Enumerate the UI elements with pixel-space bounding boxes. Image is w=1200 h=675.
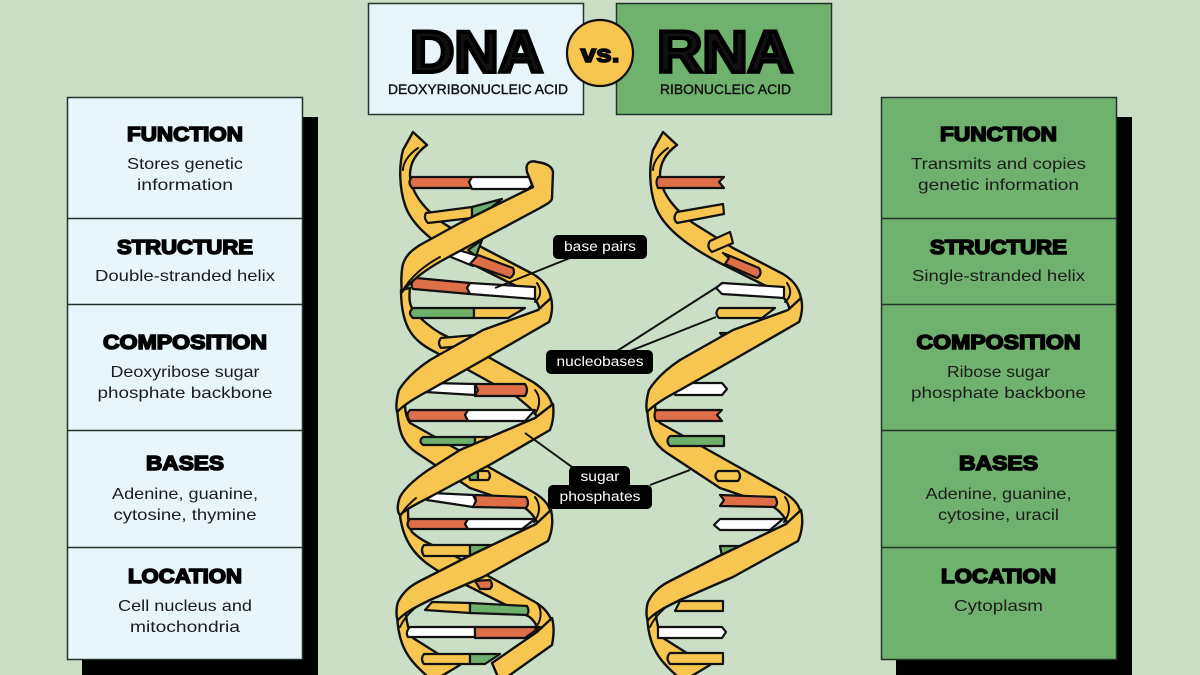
strand: fold lines	[650, 148, 790, 627]
heading: DNA composition: COMPOSITION	[103, 332, 267, 354]
heading: RNA bases: BASES	[959, 453, 1038, 475]
text: DNA composition: phosphate backbone	[98, 385, 273, 402]
text: DNA composition: Deoxyribose sugar	[110, 364, 260, 381]
text: DNA function	[127, 156, 243, 194]
text: RNA composition: phosphate backbone	[911, 385, 1086, 402]
heading: DNA function: FUNCTION	[127, 124, 243, 146]
text: RNA function: genetic information	[918, 177, 1079, 194]
text: RNA composition: Ribose sugar	[947, 364, 1051, 381]
text: RNA composition	[911, 364, 1086, 402]
text: RNA function: Transmits and copies	[911, 156, 1086, 173]
vs badge	[567, 20, 633, 86]
helix: fold lines	[400, 148, 541, 628]
heading: DNA structure: STRUCTURE	[117, 237, 253, 259]
chart: DNA double helix	[396, 132, 554, 675]
label: base pairs	[495, 235, 647, 288]
label: sugar phosphates	[525, 433, 690, 509]
title: DNA box	[368, 4, 584, 114]
text: RNA bases: cytosine, uracil	[938, 507, 1059, 524]
text: DNA function: information	[137, 177, 233, 194]
label: sugar phosphates: phosphates	[560, 489, 641, 504]
heading: DNA bases: BASES	[146, 453, 224, 475]
text: DNA function: Stores genetic	[127, 156, 243, 173]
title: DNA box: DNA	[410, 20, 543, 85]
text: RNA location: Cytoplasm	[954, 598, 1043, 615]
helix: back ribbons	[397, 132, 553, 675]
text: RNA bases	[926, 486, 1072, 524]
strand: nucleobases	[654, 177, 784, 664]
panel: DNA properties	[67, 98, 318, 675]
text: DNA bases: cytosine, thymine	[114, 507, 257, 524]
text: DNA location: mitochondria	[130, 619, 240, 636]
title: DNA box: DEOXYRIBONUCLEIC ACID	[388, 81, 568, 97]
strand: back ribbon	[647, 132, 801, 675]
title: RNA box: RNA	[657, 20, 793, 85]
helix: base pairs	[407, 177, 540, 664]
panel: RNA properties	[881, 98, 1132, 675]
heading: DNA location: LOCATION	[128, 566, 242, 588]
text: DNA location	[118, 598, 252, 636]
strand: front ribbon	[646, 298, 802, 620]
label: nucleobases	[546, 287, 717, 374]
text: RNA function	[911, 156, 1086, 194]
text: DNA composition	[98, 364, 273, 402]
label: nucleobases: nucleobases	[556, 354, 644, 369]
label: sugar phosphates: sugar	[580, 469, 620, 484]
text: DNA bases: Adenine, guanine,	[112, 486, 258, 503]
heading: RNA structure: STRUCTURE	[930, 237, 1067, 259]
text: RNA bases: Adenine, guanine,	[926, 486, 1072, 503]
text: RNA structure: Single-stranded helix	[912, 268, 1085, 285]
vs badge: vs.	[580, 41, 620, 68]
helix: front ribbons	[396, 161, 554, 675]
heading: RNA location: LOCATION	[941, 566, 1056, 588]
title: RNA box	[616, 4, 832, 114]
chart: RNA single helix	[646, 132, 802, 675]
label: base pairs: base pairs	[564, 239, 636, 254]
text: DNA bases	[112, 486, 258, 524]
heading: RNA composition: COMPOSITION	[916, 332, 1080, 354]
title: RNA box: RIBONUCLEIC ACID	[660, 81, 791, 97]
text: DNA structure: Double-stranded helix	[95, 268, 275, 285]
text: DNA location: Cell nucleus and	[118, 598, 252, 615]
heading: RNA function: FUNCTION	[940, 124, 1057, 146]
